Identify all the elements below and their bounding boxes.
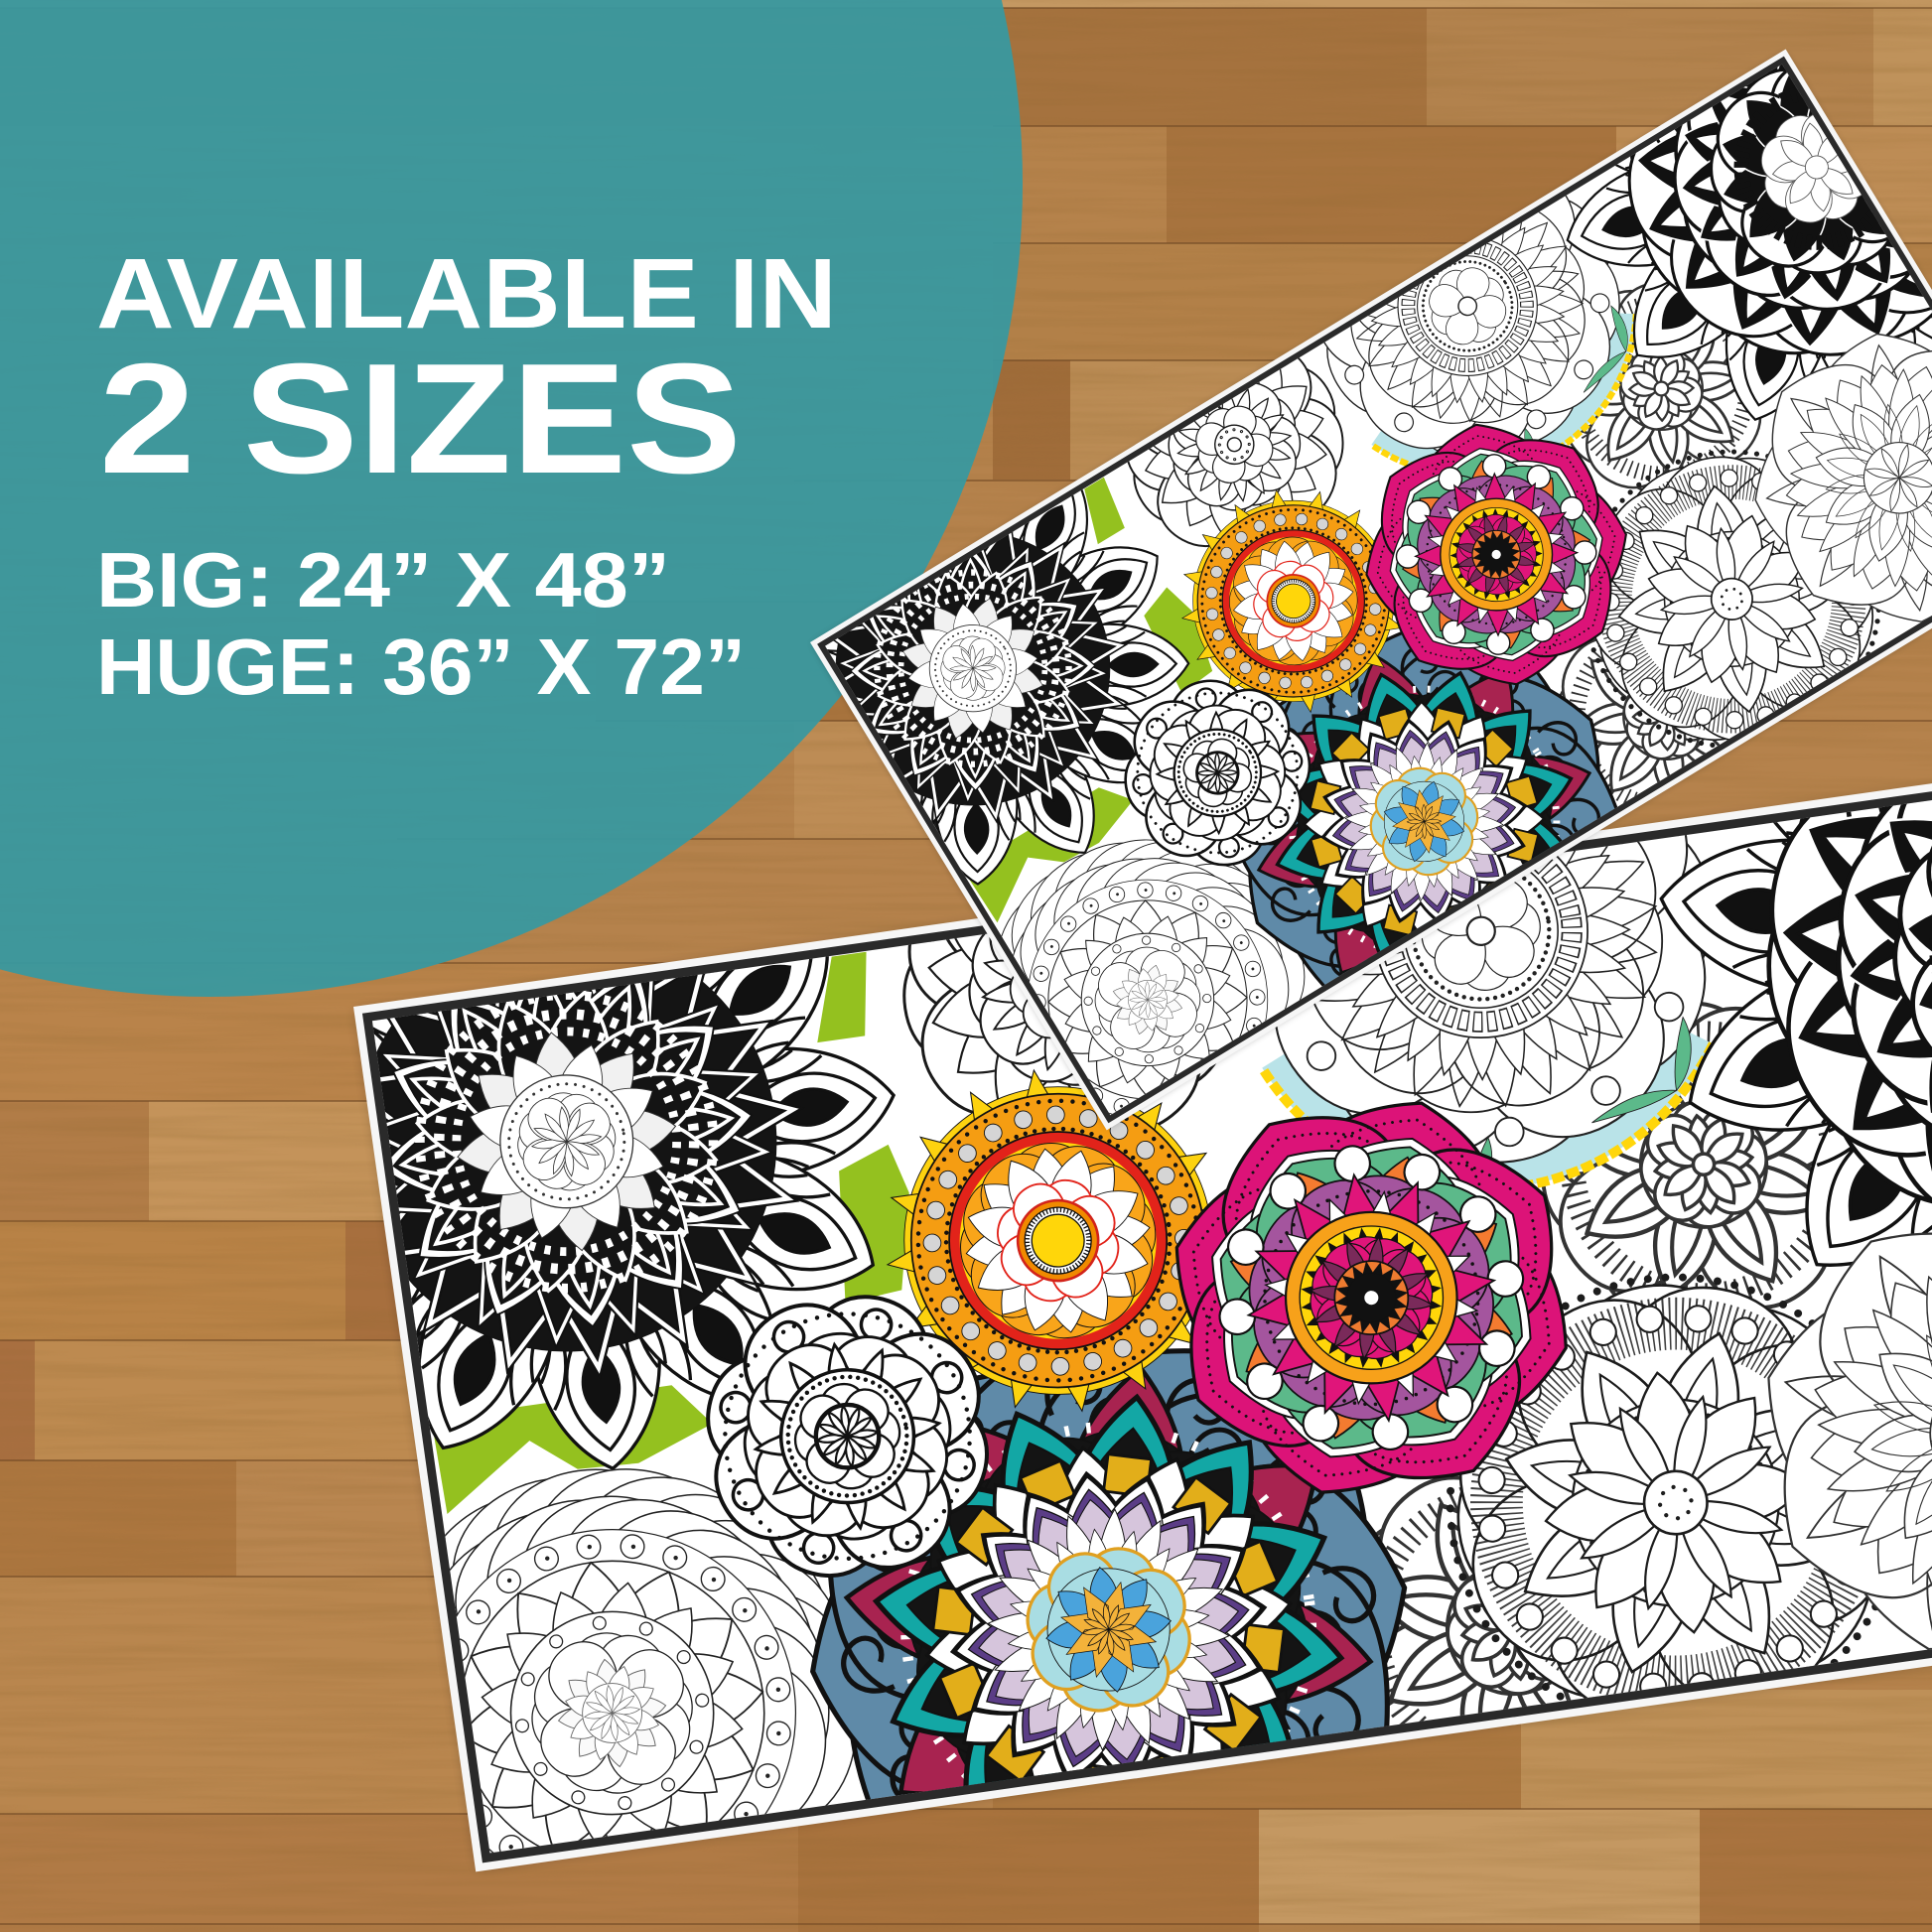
upper white mandala	[1275, 835, 1706, 1164]
poster: huge size, bottom	[353, 782, 1932, 1872]
white flower mandala	[1447, 1273, 1877, 1701]
dark mandala	[372, 956, 896, 1469]
dark corner texture	[825, 527, 1140, 842]
pink mandala	[952, 878, 1791, 1718]
heading: 2 sizes: 2 SIZES	[99, 332, 742, 506]
small dark flower	[983, 538, 1452, 1008]
size: huge: HUGE: 36” X 72”	[96, 622, 746, 711]
green patches	[827, 475, 1278, 923]
yellow chain arc	[1260, 1041, 1712, 1187]
grey flower lower mid	[1431, 481, 1902, 952]
grey flower upper mid right	[1437, 164, 1886, 614]
dark corner texture	[372, 972, 718, 1368]
yellow mandala	[1008, 316, 1579, 887]
size: big: BIG: 24” X 48”	[96, 536, 670, 623]
black paisley mandala	[1659, 804, 1932, 1267]
green patches	[434, 951, 909, 1514]
black paisley mandala	[1219, 0, 1932, 764]
teal mandala	[592, 1113, 1625, 1932]
white flower mandala	[1369, 236, 1932, 961]
grey flower upper mid right	[1541, 1002, 1827, 1309]
yellow mandala	[699, 882, 1418, 1600]
dark mandala	[568, 263, 1378, 1073]
heading: available in: AVAILABLE IN	[96, 238, 837, 349]
teal mandala	[1014, 411, 1835, 1232]
upper white mandala	[1182, 21, 1752, 591]
heading and size text	[96, 238, 837, 711]
grey flower lower mid	[1374, 1475, 1675, 1727]
green leaves	[1480, 1017, 1692, 1158]
far right mandala	[1767, 1233, 1932, 1650]
ornate white flower	[947, 157, 1522, 732]
yellow chain arc	[1371, 292, 1675, 530]
pink mandala	[1163, 221, 1830, 888]
far right mandala	[1530, 108, 1932, 848]
line-art mandala	[878, 730, 1418, 1269]
teal circle panel	[0, 0, 1023, 997]
line-art mandala	[273, 1374, 951, 1932]
poster: big size, top	[500, 0, 1932, 1389]
light blue sector	[1262, 1033, 1712, 1184]
light blue sector	[1336, 233, 1675, 530]
green leaves	[1443, 305, 1664, 491]
small dark flower	[552, 1141, 1143, 1731]
ornate white flower	[902, 933, 1217, 1126]
